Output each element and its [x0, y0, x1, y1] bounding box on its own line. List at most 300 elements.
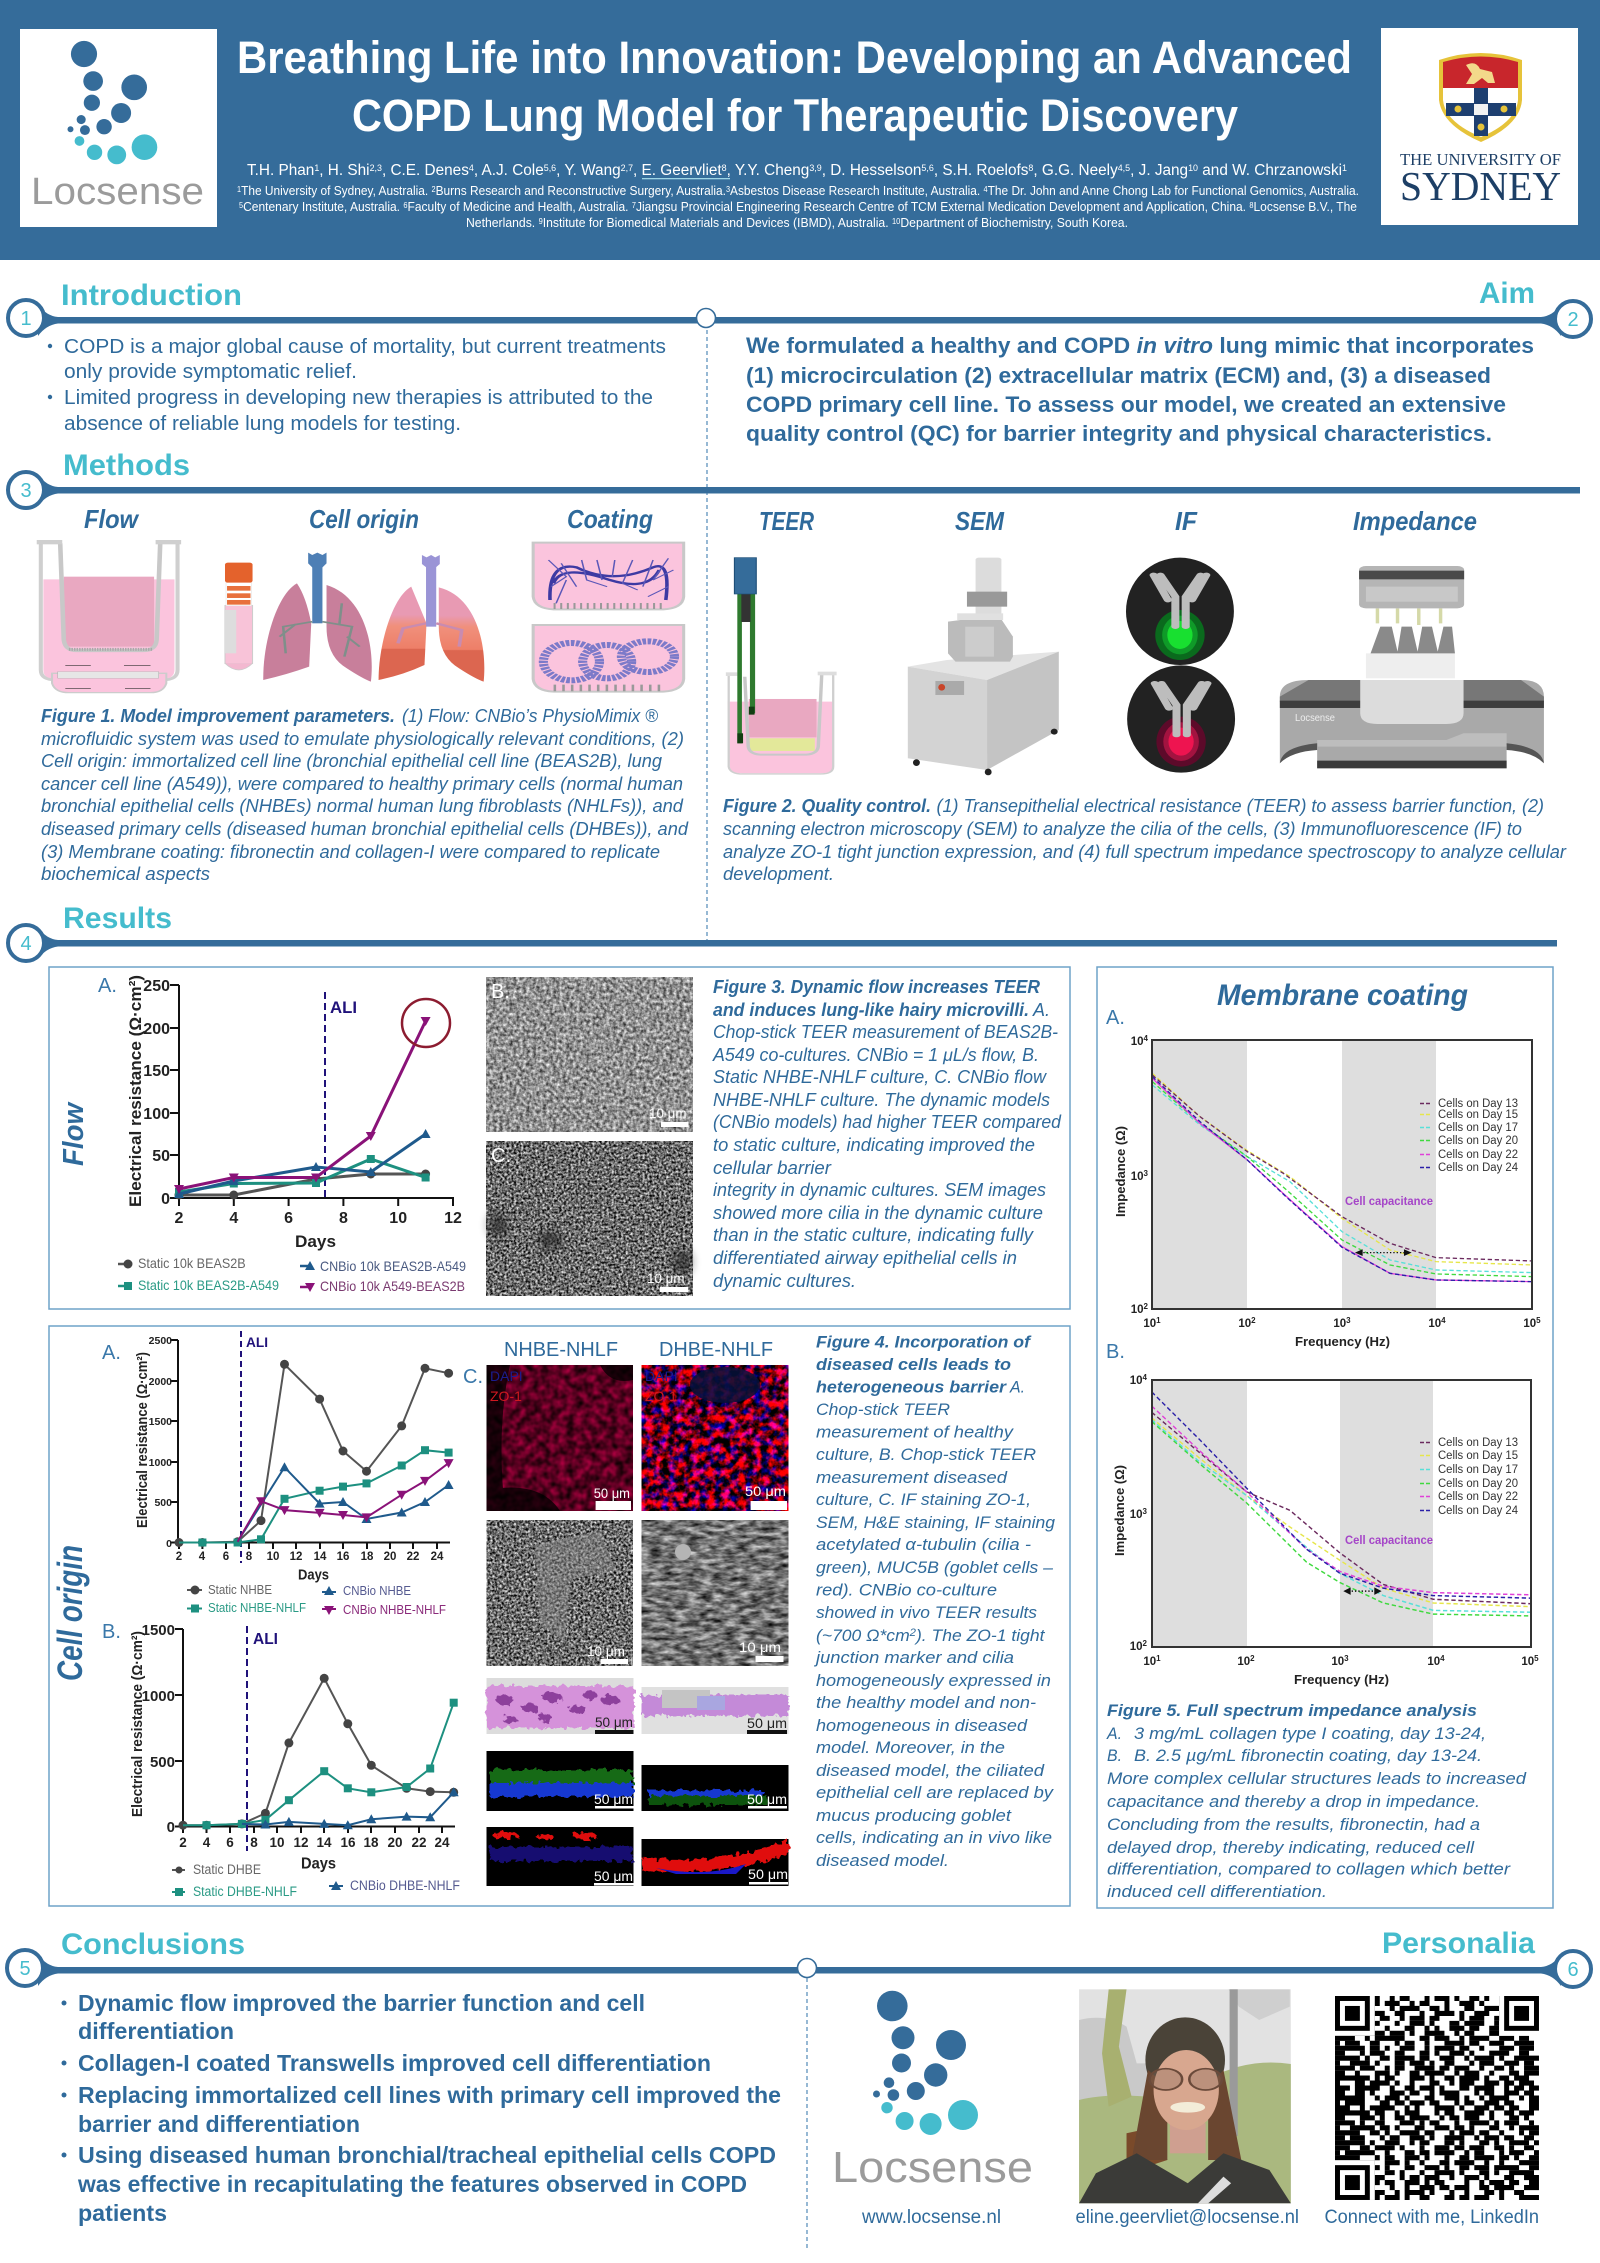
chart: impedance collagen: 3 [1144, 1169, 1149, 1178]
authors: 5,6 [544, 163, 556, 173]
chart: healthy TEER: 22 [407, 1551, 419, 1563]
chart: impedance fibronectin: Impedance (Ω) [1113, 1465, 1127, 1556]
logo: University of Sydney: THE UNIVERSITY OF [1400, 150, 1561, 169]
affiliations: Asbestos Disease Research Institute, Australia. [730, 183, 984, 198]
heading: Personalia: Personalia [1382, 1927, 1535, 1960]
authors: , C.E. Denes [382, 162, 469, 179]
chart: healthy TEER: Electrical resistance (Ω·cm²) [135, 1352, 151, 1528]
chart: impedance fibronectin: 10 [1427, 1656, 1440, 1668]
chart: healthy TEER: 500 [154, 1497, 172, 1509]
label: A collagen: A. [1106, 1007, 1125, 1029]
subheadings: methods: SEM [955, 506, 1005, 536]
chart: diseased TEER: Days [301, 1856, 336, 1872]
text: figure 4 caption: red). CNBio co-culture [816, 1580, 997, 1600]
text: conclusions bullets: Replacing immortalized cell lines with primary cell improved the [78, 2082, 781, 2108]
title [237, 32, 1352, 141]
label: B fibronectin: B. [1106, 1341, 1125, 1363]
image: ZO-1 NHBE: ZO-1 [490, 1388, 522, 1404]
text: figure 4 caption: (~700 Ω*cm [816, 1626, 907, 1645]
chart: impedance fibronectin: 10 [1521, 1656, 1534, 1668]
legend: flow chart: Static 10k BEAS2B [138, 1255, 246, 1271]
affiliations: 10 [892, 217, 901, 226]
chart: diseased TEER: 14 [316, 1835, 332, 1850]
chart: TEER flow: 150 [143, 1063, 170, 1080]
affiliations: The Dr. John and Anne Chong Lab for Functional Genomics, Australia. [988, 183, 1359, 198]
text: figure 5 caption: B. [1107, 1746, 1122, 1765]
image: H&E NHBE [486, 1678, 634, 1734]
text: conclusions bullets [62, 1990, 781, 2226]
text: introduction bullets: absence of reliable lung models for testing. [64, 413, 461, 435]
text: figure 4 caption: junction marker and cilia [814, 1648, 1014, 1667]
image: goblet IF DHBE: 50 μm [748, 1866, 788, 1882]
text: figure 2 caption: development. [723, 864, 834, 884]
logo: Locsense large: Locsense [832, 2143, 1033, 2192]
text: introduction bullets: only provide symptomatic relief. [64, 361, 357, 383]
chart: diseased TEER: 6 [226, 1835, 234, 1850]
authors: 8 [722, 163, 727, 173]
text: figure 1 caption: cancer cell line (A549)), were compared to healthy primary cells (normal human [41, 774, 683, 794]
chart: TEER flow: 2 [175, 1210, 184, 1227]
text: figure 5 caption: More complex cellular structures leads to increased [1107, 1769, 1527, 1788]
section bar 5-6: 6 [1567, 1959, 1579, 1981]
text: figure 4 caption: Chop-stick TEER [816, 1400, 950, 1419]
image: cilia IF DHBE: 50 μm [747, 1791, 787, 1807]
image: SEM flow culture [486, 1141, 693, 1296]
text: figure 3 caption: A. [1032, 1000, 1050, 1020]
legend: healthy TEER: CNBio NHBE [343, 1584, 411, 1598]
text: figure 4 caption: epithelial cell are replaced by [816, 1783, 1055, 1802]
image: ZO-1 NHBE: DAPI [490, 1368, 523, 1384]
text: figure 4 caption: diseased model. [816, 1851, 949, 1870]
authors: 5,6 [921, 163, 934, 173]
chart: diseased TEER: Electrical resistance (Ω·cm²) [129, 1631, 146, 1817]
chart: diseased TEER: 0 [167, 1819, 175, 1836]
subheadings: methods [84, 504, 1477, 536]
legend: impedance fibronectin: Cells on Day 22 [1438, 1491, 1518, 1503]
text: figure 3 caption: integrity in dynamic cultures. SEM images [713, 1180, 1046, 1200]
legend: impedance fibronectin: Cells on Day 15 [1438, 1450, 1518, 1462]
chart: healthy TEER: 4 [199, 1551, 206, 1563]
authors: , S.H. Roelofs [934, 162, 1029, 179]
chart: TEER flow: 6 [284, 1210, 293, 1227]
text: figure 5 caption: Concluding from the results, fibronectin, had a [1107, 1815, 1480, 1834]
chart: TEER flow: 4 [229, 1210, 238, 1227]
affiliations: Jiangsu Provincial Engineering Research Centre of TCM External Medication Development and Application, China. [636, 199, 1249, 214]
heading: flow rotated: Flow [58, 1101, 90, 1166]
text: conclusions bullets: barrier and differentiation [78, 2111, 360, 2137]
affiliations: Centenary Institute, Australia. [243, 199, 403, 214]
chart: impedance collagen: 10 [1131, 1304, 1144, 1316]
image: ZO-1 DHBE: ZO-1 [645, 1388, 677, 1404]
legend: healthy TEER [187, 1583, 446, 1617]
text: figure 1 caption [41, 706, 689, 884]
text: figure 4 caption: measurement of healthy [816, 1422, 1015, 1442]
chart: impedance fibronectin: 2 [1143, 1639, 1148, 1648]
chart: impedance fibronectin [1113, 1373, 1539, 1687]
heading: Results: Results [63, 902, 172, 935]
authors: 4,5 [1118, 163, 1130, 173]
authors: T.H. Phan [247, 162, 315, 179]
text: aim: We formulated a healthy and COPD in vitro lung mimic that incorporates [746, 333, 1534, 358]
image: goblet IF NHBE: 50 μm [594, 1868, 633, 1884]
label: device brand: Locsense [1295, 713, 1335, 724]
column heading: DHBE-NHLF: DHBE-NHLF [659, 1339, 773, 1361]
text: figure 3 caption: showed more cilia in the dynamic culture [713, 1203, 1043, 1223]
chart: diseased TEER: 10 [269, 1835, 285, 1850]
chart: diseased TEER: 1000 [142, 1688, 175, 1705]
legend: impedance collagen: Cells on Day 15 [1438, 1109, 1518, 1121]
affiliations: Faculty of Medicine and Health, Australia. [407, 199, 632, 214]
text: conclusions bullets: was effective in recapitulating the features observed in COPD [77, 2171, 747, 2197]
text: figure 5 caption [1106, 1701, 1527, 1901]
text: figure 4 caption: culture, C. IF staining ZO-1, [816, 1490, 1031, 1509]
image: SEM NHBE [486, 1520, 633, 1666]
header banner [0, 0, 1600, 260]
chart: healthy TEER: ALI [246, 1334, 268, 1350]
image: goblet IF DHBE [642, 1839, 788, 1886]
text: figure 1 caption: diseased primary cells (diseased human bronchial epithelial cells (DHBEs)), and [41, 819, 689, 839]
text: figure 1 caption: bronchial epithelial cells (NHBEs) normal human lung fibroblasts (NHLFs)), and [41, 796, 684, 816]
text: figure 1 caption: biochemical aspects [41, 864, 210, 884]
text: conclusions bullets: Dynamic flow improved the barrier function and cell [78, 1990, 645, 2016]
text: aim: COPD primary cell line. To assess our model, we created an extensive [746, 392, 1506, 417]
text: conclusions bullets: patients [78, 2200, 167, 2226]
affiliations: 3 [726, 185, 731, 194]
text: figure 4 caption: homogeneous in diseased [816, 1716, 1028, 1735]
logo: Locsense header [20, 29, 217, 227]
chart: impedance collagen: 10 [1131, 1036, 1144, 1048]
text: figure 4 caption: culture, B. Chop-stick TEER [816, 1445, 1036, 1464]
chart: impedance fibronectin: 10 [1130, 1375, 1143, 1387]
image: ZO-1 DHBE: DAPI [645, 1368, 678, 1384]
image: cilia IF NHBE: 50 μm [594, 1791, 633, 1807]
illustration: SEM microscope [908, 558, 1059, 775]
chart: impedance fibronectin: 10 [1130, 1641, 1143, 1653]
image: SEM static culture: B. [491, 981, 510, 1003]
legend: impedance collagen: Cells on Day 20 [1438, 1135, 1518, 1147]
chart: TEER flow: 100 [143, 1106, 170, 1123]
affiliations: 6 [403, 201, 408, 210]
legend: diseased TEER [172, 1862, 460, 1899]
legend: impedance collagen: Cells on Day 13 [1438, 1098, 1518, 1110]
text: figure 4 caption [814, 1332, 1056, 1870]
chart: impedance collagen: Impedance (Ω) [1114, 1126, 1128, 1217]
authors: , Y.Y. Cheng [727, 162, 809, 179]
text: figure 2 caption: analyze ZO-1 tight junction expression, and (4) full spectrum impedance spectroscopy to analyze cellular [723, 842, 1567, 862]
text: figure 4 caption: A. [1009, 1378, 1025, 1396]
subheadings: methods: TEER [759, 506, 814, 536]
legend: impedance collagen: Cells on Day 24 [1438, 1162, 1519, 1174]
image: ZO-1 NHBE [486, 1365, 633, 1511]
chart: diseased TEER: 1500 [142, 1622, 175, 1639]
authors: , H. Shi [319, 162, 370, 179]
legend: impedance fibronectin: Cells on Day 13 [1438, 1437, 1518, 1449]
chart: TEER flow: 0 [161, 1191, 170, 1208]
legend: impedance collagen: Cells on Day 22 [1438, 1149, 1518, 1161]
text: figure 5 caption: delayed drop, thereby indicating, reduced cell [1107, 1838, 1475, 1857]
text: figure 3 caption: cellular barrier [713, 1158, 832, 1178]
legend: flow chart: CNBio 10k A549-BEAS2B [320, 1278, 465, 1294]
chart: impedance collagen: 4 [1441, 1316, 1446, 1325]
chart: impedance fibronectin: 10 [1237, 1656, 1250, 1668]
subheadings: methods: Impedance [1353, 506, 1477, 536]
text: figure 4 caption: green), MUC5B (goblet cells – [816, 1558, 1054, 1577]
chart: healthy TEER: 1500 [149, 1416, 172, 1428]
chart: impedance collagen: 2 [1251, 1316, 1256, 1325]
chart: impedance collagen [1114, 1034, 1541, 1349]
subheadings: methods: IF [1175, 506, 1198, 536]
affiliations: 4 [984, 185, 988, 194]
image: ZO-1 DHBE [642, 1365, 788, 1511]
image: SEM DHBE: 10 μm [739, 1639, 781, 1655]
heading: cell origin rotated: Cell origin [51, 1545, 90, 1681]
chart: impedance fibronectin: Frequency (Hz) [1294, 1673, 1389, 1687]
text: figure 4 caption: homogeneously expressed in [816, 1671, 1051, 1690]
illustration: fibronectin coating well [533, 625, 684, 692]
subheadings: methods: Flow [84, 504, 140, 534]
text: figure 5 caption: induced cell differentiation. [1107, 1882, 1327, 1901]
text: figure 2 caption: scanning electron microscopy (SEM) to analyze the cilia of the cells, (3) Immunofluorescence (IF) to [723, 819, 1522, 839]
authors: , Y. Wang [556, 162, 621, 179]
chart: impedance fibronectin: 1 [1156, 1654, 1161, 1663]
section bar 5-6: 5 [19, 1958, 31, 1980]
chart: TEER flow: 250 [143, 978, 170, 995]
chart: diseased TEER: ALI [253, 1631, 278, 1648]
legend: flow chart: CNBio 10k BEAS2B-A549 [320, 1258, 466, 1274]
chart: diseased TEER: 20 [387, 1835, 403, 1850]
section bar 1-2: 1 [20, 308, 32, 330]
chart: healthy TEER: 12 [290, 1551, 302, 1563]
chart: diseased TEER: 18 [363, 1835, 379, 1850]
chart: healthy TEER: 2500 [149, 1335, 172, 1347]
text: figure 3 caption: (CNBio models) had higher TEER compared [713, 1112, 1062, 1132]
text: figure 1 caption: (1) Flow: CNBio’s PhysioMimix ® [402, 706, 659, 726]
chart: TEER flow: Days [295, 1232, 336, 1251]
title: Breathing Life into Innovation: Developing an Advanced [237, 32, 1352, 83]
image: cilia IF DHBE [642, 1765, 788, 1811]
text: figure 4 caption: the healthy model and non- [816, 1693, 1036, 1712]
text: conclusions bullets: Collagen-I coated Transwells improved cell differentiation [78, 2050, 711, 2076]
illustration: TEER electrode [726, 558, 837, 774]
text: figure 5 caption: Figure 5. Full spectrum impedance analysis [1107, 1701, 1477, 1720]
authors: 8 [1028, 163, 1033, 173]
chart: TEER flow: ALI [330, 998, 357, 1017]
chart: impedance collagen: 10 [1238, 1318, 1251, 1330]
chart: healthy TEER: 18 [361, 1551, 374, 1563]
image: SEM NHBE: 10 μm [587, 1643, 625, 1659]
text: figure 4 caption: diseased model, the ciliated [816, 1761, 1045, 1780]
chart: TEER flow: 12 [444, 1210, 462, 1227]
chart: healthy TEER [135, 1331, 450, 1584]
heading: Introduction: Introduction [61, 279, 242, 312]
chart: TEER flow: 200 [143, 1021, 170, 1038]
chart: healthy TEER: Days [298, 1568, 329, 1584]
chart: diseased TEER: 22 [411, 1835, 427, 1850]
legend: impedance fibronectin: Cells on Day 24 [1438, 1505, 1519, 1517]
text: aim: quality control (QC) for barrier integrity and physical characteristics. [746, 421, 1492, 446]
text: figure 4 caption: mucus producing goblet [816, 1806, 1012, 1825]
label: website: www.locsense.nl [861, 2207, 1001, 2228]
legend: impedance fibronectin: Cells on Day 20 [1438, 1478, 1518, 1490]
chart: impedance fibronectin: 3 [1344, 1654, 1349, 1663]
chart: impedance fibronectin: 3 [1143, 1507, 1148, 1516]
section bar 4: 4 [20, 933, 32, 955]
text: figure 3 caption: differentiated airway epithelial cells in [713, 1248, 1017, 1268]
legend: impedance collagen [1420, 1098, 1519, 1174]
affiliations: 2 [431, 185, 436, 194]
text: figure 3 caption [712, 977, 1062, 1291]
text: introduction bullets [48, 336, 666, 435]
text: figure 1 caption: (3) Membrane coating: fibronectin and collagen-I were compared to replicate [41, 842, 660, 862]
text: figure 4 caption: diseased cells leads to [816, 1355, 1011, 1374]
legend: flow chart [118, 1255, 466, 1294]
legend: diseased TEER: Static DHBE-NHLF [193, 1884, 297, 1899]
authors: 2,3 [370, 163, 382, 173]
image: goblet IF NHBE [486, 1827, 634, 1886]
legend: diseased TEER: CNBio DHBE-NHLF [350, 1878, 460, 1893]
text: aim [746, 333, 1534, 446]
subheadings: methods: Cell origin [309, 504, 419, 534]
panel: membrane coating [1097, 967, 1553, 1908]
text: aim: (1) microcirculation (2) extracellular matrix (ECM) and, (3) a diseased [746, 363, 1491, 388]
authors: 4 [469, 163, 474, 173]
authors: , D. Hesselson [822, 162, 921, 179]
chart: impedance fibronectin: 10 [1130, 1509, 1143, 1521]
text: figure 2 caption: Figure 2. Quality control. [723, 796, 931, 816]
illustration: collagen coating well [533, 543, 684, 609]
image: H&E DHBE [642, 1687, 788, 1734]
text: figure 3 caption: than in the static culture, indicating fully [713, 1225, 1034, 1245]
image: SEM flow culture: 10 μm [647, 1270, 684, 1286]
chart: impedance collagen: 1 [1156, 1316, 1161, 1325]
text: figure 1 caption: Cell origin: immortalized cell line (bronchial epithelial cell line (BEAS2B), lung [41, 751, 662, 771]
section bar 1-2 [8, 300, 1591, 940]
QR code [1335, 1996, 1539, 2200]
chart: diseased TEER: 12 [293, 1835, 309, 1850]
text: figure 4 caption: 2 [909, 1627, 916, 1639]
affiliations [237, 183, 1359, 230]
image: cilia IF NHBE [486, 1751, 634, 1811]
logo: University of Sydney: SYDNEY [1400, 163, 1561, 209]
text: figure 3 caption: to static culture, indicating improved the [713, 1135, 1035, 1155]
chart: healthy TEER: 0 [166, 1538, 172, 1550]
authors: , A.J. Cole [474, 162, 544, 179]
text: figure 4 caption: SEM, H&E staining, IF staining [816, 1513, 1056, 1532]
chart: diseased TEER: 4 [203, 1835, 211, 1850]
chart: healthy TEER: 10 [267, 1551, 279, 1563]
text: figure 4 caption: Figure 4. Incorporation of [816, 1332, 1032, 1352]
chart: impedance collagen: Cell capacitance [1345, 1196, 1433, 1208]
text: figure 5 caption: B. 2.5 µg/mL fibronectin coating, day 13-24. [1134, 1746, 1482, 1765]
chart: healthy TEER: 2 [176, 1551, 182, 1563]
affiliations: 1 [237, 185, 242, 194]
chart: impedance collagen: 10 [1523, 1318, 1536, 1330]
legend: diseased TEER: Static DHBE [193, 1862, 261, 1877]
text: figure 4 caption: ). The ZO-1 tight [914, 1626, 1046, 1645]
chart: healthy TEER: 20 [384, 1551, 396, 1563]
text: figure 3 caption: and induces lung-like hairy microvilli. [713, 1000, 1029, 1020]
affiliations: Department of Biochemistry, South Korea. [900, 215, 1128, 230]
text: introduction bullets: Limited progress in developing new therapies is attributed to the [64, 387, 653, 409]
text: figure 5 caption: 3 mg/mL collagen type I coating, day 13-24, [1134, 1724, 1486, 1743]
chart: healthy TEER: 14 [314, 1551, 327, 1563]
heading: membrane coating: Membrane coating [1217, 979, 1468, 1012]
illustration: IF antibodies [1126, 558, 1235, 773]
legend: healthy TEER: Static NHBE [208, 1583, 272, 1597]
illustration: COPD lungs [379, 555, 484, 682]
chart: healthy TEER: 1000 [149, 1457, 172, 1469]
text: figure 1 caption: microfluidic system was used to emulate physiologically relevant conditions, (2) [41, 729, 684, 749]
chart: healthy TEER: 8 [246, 1551, 253, 1563]
panel: cell origin [49, 1326, 1070, 1906]
chart: impedance collagen: 2 [1144, 1302, 1149, 1311]
affiliations: 5 [239, 201, 244, 210]
heading: Methods: Methods [63, 449, 190, 482]
authors: , J. Jang [1130, 162, 1188, 179]
chart: impedance fibronectin: 5 [1534, 1654, 1539, 1663]
text: figure 4 caption: cells, indicating an in vivo like [816, 1828, 1052, 1847]
subheadings: methods: Coating [567, 504, 653, 534]
authors: 10 [1188, 163, 1198, 173]
photo: portrait [1079, 1989, 1291, 2203]
logo: Locsense large [832, 1991, 1033, 2192]
authors: 3,9 [809, 163, 822, 173]
chart: diseased TEER [129, 1622, 455, 1872]
chart: healthy TEER: 16 [337, 1551, 349, 1563]
image: ZO-1 NHBE: 50 μm [594, 1485, 630, 1501]
illustration: flow transwell [37, 540, 181, 693]
logo: Locsense header: Locsense [31, 171, 204, 213]
affiliations: 7 [632, 201, 636, 210]
legend: healthy TEER: Static NHBE-NHLF [208, 1601, 306, 1615]
text: introduction bullets: COPD is a major global cause of mortality, but current treatments [64, 336, 666, 358]
text: figure 3 caption: dynamic cultures. [713, 1271, 856, 1291]
label: C: C. [463, 1366, 483, 1388]
legend: impedance fibronectin [1420, 1437, 1519, 1517]
chart: impedance fibronectin: 4 [1143, 1373, 1148, 1382]
image: SEM DHBE [642, 1520, 788, 1666]
chart: diseased TEER: 500 [150, 1754, 175, 1771]
affiliations: Burns Research and Reconstructive Surgery, Australia. [436, 183, 726, 198]
legend: healthy TEER: CNBio NHBE-NHLF [343, 1603, 446, 1617]
chart: impedance collagen: 3 [1346, 1316, 1351, 1325]
image: H&E NHBE: 50 μm [595, 1714, 633, 1730]
panel: flow [49, 967, 1070, 1309]
authors [247, 162, 1347, 179]
chart: healthy TEER: 6 [223, 1551, 229, 1563]
chart: healthy TEER: 24 [431, 1551, 444, 1563]
affiliations: The University of Sydney, Australia. [241, 183, 431, 198]
authors: , G.G. Neely [1033, 162, 1118, 179]
column heading: NHBE-NHLF: NHBE-NHLF [504, 1339, 618, 1361]
image: ZO-1 DHBE: 50 μm [745, 1483, 786, 1499]
section bar 4 [8, 925, 1557, 961]
section bar 1-2: 2 [1567, 309, 1579, 331]
text: figure 3 caption: NHBE-NHLF culture. The dynamic models [713, 1090, 1050, 1110]
section bar 3 [8, 472, 1580, 508]
illustration: cell vial [225, 563, 253, 670]
label: B diseased: B. [102, 1621, 121, 1643]
title: COPD Lung Model for Therapeutic Discovery [352, 90, 1238, 141]
text: figure 2 caption [723, 796, 1567, 884]
heading: Conclusions: Conclusions [61, 1928, 245, 1961]
chart: impedance fibronectin: 2 [1250, 1654, 1255, 1663]
affiliations: Locsense B.V., The [1253, 199, 1357, 214]
authors: and W. Chrzanowski [1198, 162, 1342, 179]
affiliations: Institute for Biomedical Materials and Devices (IBMD), Australia. [543, 215, 892, 230]
label: A: A. [98, 975, 117, 997]
text: figure 1 caption: Figure 1. Model improvement parameters. [41, 706, 395, 726]
